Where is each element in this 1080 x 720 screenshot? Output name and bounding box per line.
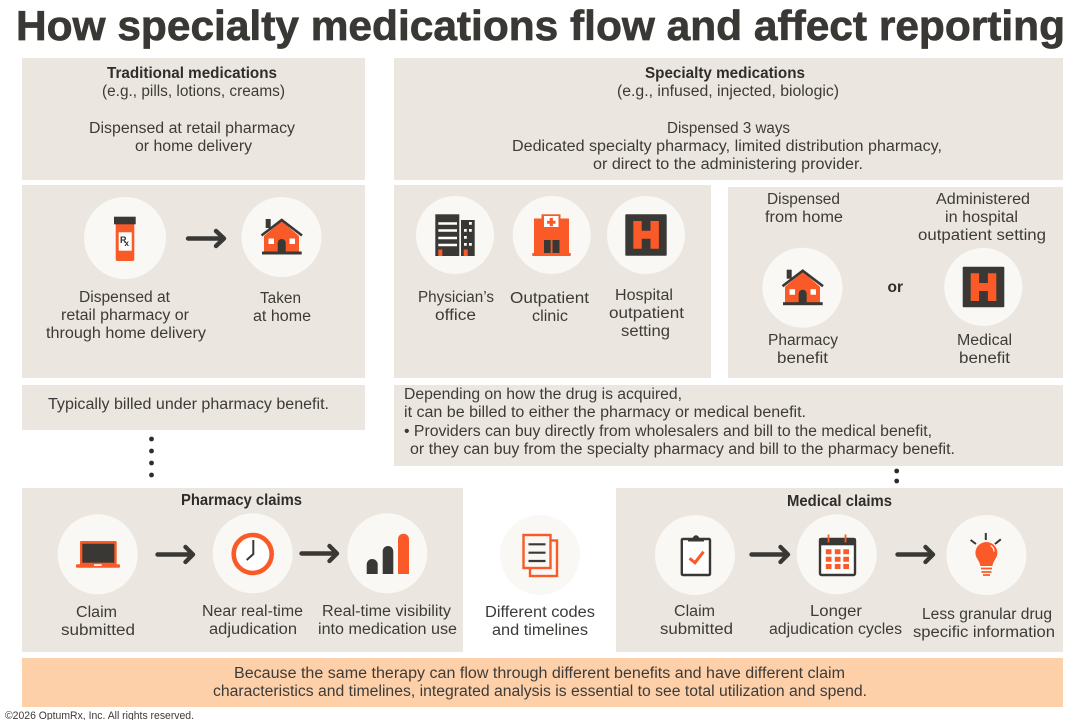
icon: bar chart bbox=[347, 513, 427, 593]
icon: prescription bottle: R bbox=[120, 235, 127, 245]
label: taken at home: at home bbox=[253, 308, 311, 325]
icon: light bulb bbox=[946, 515, 1026, 595]
panel: traditional medications header bbox=[22, 58, 365, 180]
label: longer adjudication cycles: Longer bbox=[810, 603, 862, 620]
label: physician's office: Physician’s bbox=[418, 289, 494, 306]
label: claim submitted bbox=[61, 604, 135, 639]
label: longer adjudication cycles bbox=[769, 603, 902, 638]
panel: pharmacy benefit billing note: Typically billed under pharmacy benefit. bbox=[48, 396, 329, 413]
icon: outpatient clinic bbox=[513, 196, 591, 274]
label: administered in hospital outpatient setting bbox=[918, 191, 1046, 244]
text: specialty dispensing: Dispensed 3 ways bbox=[667, 120, 790, 137]
icon: laptop bbox=[58, 514, 138, 594]
label: real-time visibility into medication use bbox=[318, 603, 457, 638]
label: dispensed from home bbox=[765, 191, 843, 226]
panel: benefit comparison bbox=[728, 187, 1063, 378]
text: traditional dispensing bbox=[89, 120, 295, 155]
label: near real-time adjudication: adjudication bbox=[209, 621, 297, 638]
text: specialty examples: (e.g., infused, injected, biologic) bbox=[617, 83, 839, 100]
label: administered in hospital outpatient setting: outpatient setting bbox=[918, 227, 1046, 244]
panel: specialty billing explanation: • Providers can buy directly from wholesalers and bill to the medical benefit, bbox=[404, 423, 932, 440]
label: dispensed at retail pharmacy: Dispensed at bbox=[79, 289, 171, 306]
callout: integrated analysis: Because the same therapy can flow through different benefits and have different claim bbox=[234, 665, 845, 682]
label: hospital outpatient setting: Hospital bbox=[615, 287, 673, 304]
label: claim submitted: submitted bbox=[660, 621, 733, 638]
heading: pharmacy claims: Pharmacy claims bbox=[181, 492, 302, 509]
icon: clipboard bbox=[655, 515, 735, 595]
label: longer adjudication cycles: adjudication cycles bbox=[769, 621, 902, 638]
icon: clock bbox=[213, 513, 293, 593]
panel: specialty billing explanation: it can be billed to either the pharmacy or medical benefit. bbox=[404, 404, 806, 421]
label: dispensed from home: Dispensed bbox=[767, 191, 840, 208]
text: specialty dispensing bbox=[512, 120, 942, 173]
callout: integrated analysis: characteristics and timelines, integrated analysis is essential to see total utilization and spend. bbox=[213, 683, 867, 700]
text: traditional dispensing: Dispensed at retail pharmacy bbox=[89, 120, 295, 137]
heading: specialty medications: Specialty medications bbox=[645, 65, 805, 82]
icon: documents bbox=[500, 515, 580, 595]
label: different codes and timelines: and timelines bbox=[492, 622, 588, 639]
label: less granular drug specific information: Less granular drug bbox=[922, 606, 1052, 623]
block: different codes and timelines bbox=[485, 515, 595, 639]
panel: medical claims bbox=[616, 488, 1063, 652]
panel: pharmacy claims bbox=[22, 488, 463, 652]
icon: prescription bottle bbox=[84, 197, 166, 279]
arrow: adjudication to visibility bbox=[302, 546, 337, 561]
label: pharmacy benefit: benefit bbox=[777, 350, 829, 367]
label: dispensed at retail pharmacy bbox=[46, 289, 206, 342]
icon: hospital sign, medical benefit bbox=[944, 248, 1022, 326]
label: hospital outpatient setting: outpatient bbox=[609, 305, 685, 322]
label: claim submitted: Claim bbox=[674, 603, 715, 620]
text: specialty dispensing: or direct to the administering provider. bbox=[593, 156, 863, 173]
icon: house bbox=[242, 197, 322, 277]
icon: calendar bbox=[797, 514, 877, 594]
label: dispensed from home: from home bbox=[765, 209, 843, 226]
arrow: bottle to home bbox=[188, 231, 224, 246]
label: dispensed at retail pharmacy: retail pharmacy or bbox=[61, 307, 189, 324]
icon: hospital sign bbox=[607, 196, 685, 274]
label: pharmacy benefit bbox=[768, 332, 838, 367]
arrow: claim to adjudication cycles bbox=[752, 547, 788, 562]
label: medical benefit bbox=[957, 332, 1012, 367]
icon: house, pharmacy benefit bbox=[762, 248, 842, 328]
label: different codes and timelines bbox=[485, 604, 595, 639]
text: specialty dispensing: Dedicated specialty pharmacy, limited distribution pharmacy, bbox=[512, 138, 942, 155]
label: outpatient clinic: clinic bbox=[532, 308, 568, 325]
label: outpatient clinic bbox=[510, 290, 590, 325]
arrow: claim to adjudication bbox=[158, 547, 193, 562]
label: pharmacy benefit: Pharmacy bbox=[768, 332, 838, 349]
label: taken at home: Taken bbox=[260, 290, 301, 307]
label: hospital outpatient setting: setting bbox=[621, 323, 670, 340]
label: hospital outpatient setting bbox=[609, 287, 685, 340]
heading: traditional medications: Traditional medications bbox=[107, 65, 277, 82]
panel: specialty sites of care bbox=[394, 185, 711, 378]
label: near real-time adjudication: Near real-time bbox=[202, 603, 303, 620]
label: claim submitted: submitted bbox=[61, 622, 135, 639]
panel: pharmacy benefit billing note bbox=[22, 385, 365, 430]
panel: specialty medications header bbox=[394, 58, 1063, 180]
arrow: adjudication cycles to drug information bbox=[898, 547, 933, 562]
heading: medical claims: Medical claims bbox=[787, 493, 892, 510]
text: or: or bbox=[888, 279, 903, 296]
callout: integrated analysis bbox=[22, 658, 1063, 707]
label: near real-time adjudication bbox=[202, 603, 303, 638]
panel: traditional flow bbox=[22, 185, 365, 378]
text: traditional dispensing: or home delivery bbox=[135, 138, 252, 155]
title: How specialty medications flow and affect reporting bbox=[16, 2, 1065, 49]
icon: prescription bottle: x bbox=[124, 239, 130, 248]
label: less granular drug specific information: specific information bbox=[913, 624, 1055, 641]
label: medical benefit: benefit bbox=[959, 350, 1011, 367]
label: dispensed at retail pharmacy: through home delivery bbox=[46, 325, 206, 342]
label: claim submitted bbox=[660, 603, 733, 638]
label: administered in hospital outpatient setting: in hospital bbox=[945, 209, 1018, 226]
icon: office buildings bbox=[416, 196, 494, 274]
label: claim submitted: Claim bbox=[76, 604, 117, 621]
label: physician's office: office bbox=[435, 307, 476, 324]
panel: specialty billing explanation: Depending on how the drug is acquired, bbox=[404, 386, 682, 403]
label: real-time visibility into medication use: into medication use bbox=[318, 621, 457, 638]
panel: specialty billing explanation: or they can buy from the specialty pharmacy and bill to the pharmacy benefit. bbox=[410, 441, 955, 458]
label: taken at home bbox=[253, 290, 311, 325]
label: administered in hospital outpatient setting: Administered bbox=[936, 191, 1030, 208]
label: less granular drug specific information bbox=[913, 606, 1055, 641]
label: physician's office bbox=[418, 289, 494, 324]
label: medical benefit: Medical bbox=[957, 332, 1012, 349]
dotted connector: specialty billing to medical claims bbox=[894, 469, 899, 483]
text: traditional examples: (e.g., pills, lotions, creams) bbox=[102, 83, 285, 100]
label: real-time visibility into medication use: Real-time visibility bbox=[322, 603, 451, 620]
label: outpatient clinic: Outpatient bbox=[510, 290, 590, 307]
panel: specialty billing explanation bbox=[394, 385, 1063, 466]
label: different codes and timelines: Different codes bbox=[485, 604, 595, 621]
dotted connector: pharmacy billing to pharmacy claims bbox=[149, 437, 154, 477]
